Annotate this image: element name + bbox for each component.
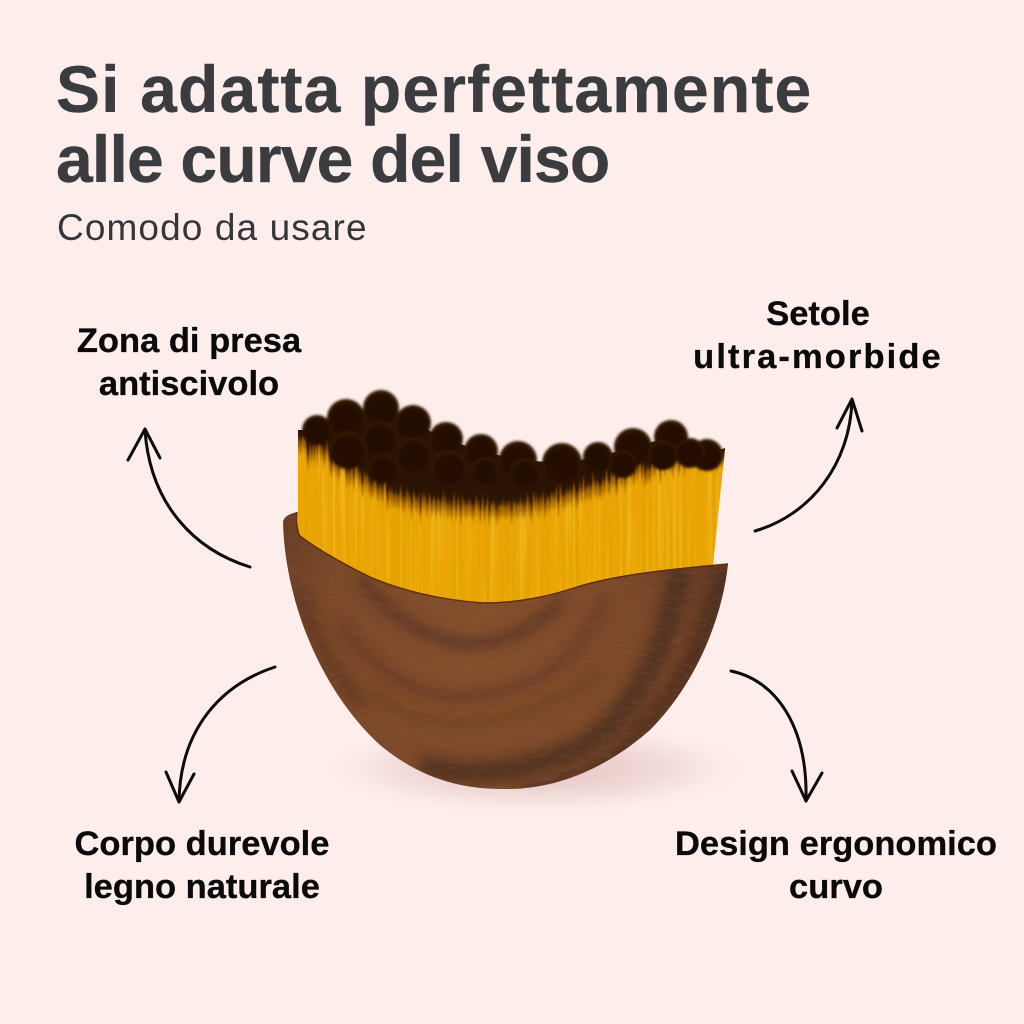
label: bristles: Setole [766, 295, 870, 333]
arrow: bristles [755, 399, 862, 531]
label: body: legno naturale [84, 868, 320, 906]
shadow [307, 720, 763, 816]
title: alle curve del viso [56, 122, 609, 196]
label: bristles: ultra-morbide [693, 338, 943, 376]
label: body [75, 825, 329, 906]
arrow: body [166, 667, 275, 802]
inner rim line [297, 512, 728, 603]
wood grain [291, 565, 728, 789]
label: grip zone: Zona di presa [77, 322, 301, 360]
wooden body [283, 512, 728, 789]
label: design: Design ergonomico [675, 825, 997, 863]
arrow: design [731, 671, 822, 801]
title: Si adatta perfettamente [56, 52, 812, 126]
label: bristles [693, 295, 943, 376]
label: grip zone [77, 322, 302, 403]
label: design: curvo [789, 868, 883, 906]
subtitle: Comodo da usare [57, 207, 368, 248]
dark bristle tips fade [298, 416, 725, 517]
label: body: Corpo durevole [75, 825, 329, 863]
icon: brush [280, 390, 740, 795]
title [56, 52, 812, 196]
arrow: grip zone [128, 429, 250, 567]
label: design [675, 825, 997, 906]
bristle tufts [302, 390, 723, 488]
bristles [298, 415, 725, 602]
label: grip zone: antiscivolo [99, 365, 279, 403]
bristle tip transition [298, 430, 725, 526]
